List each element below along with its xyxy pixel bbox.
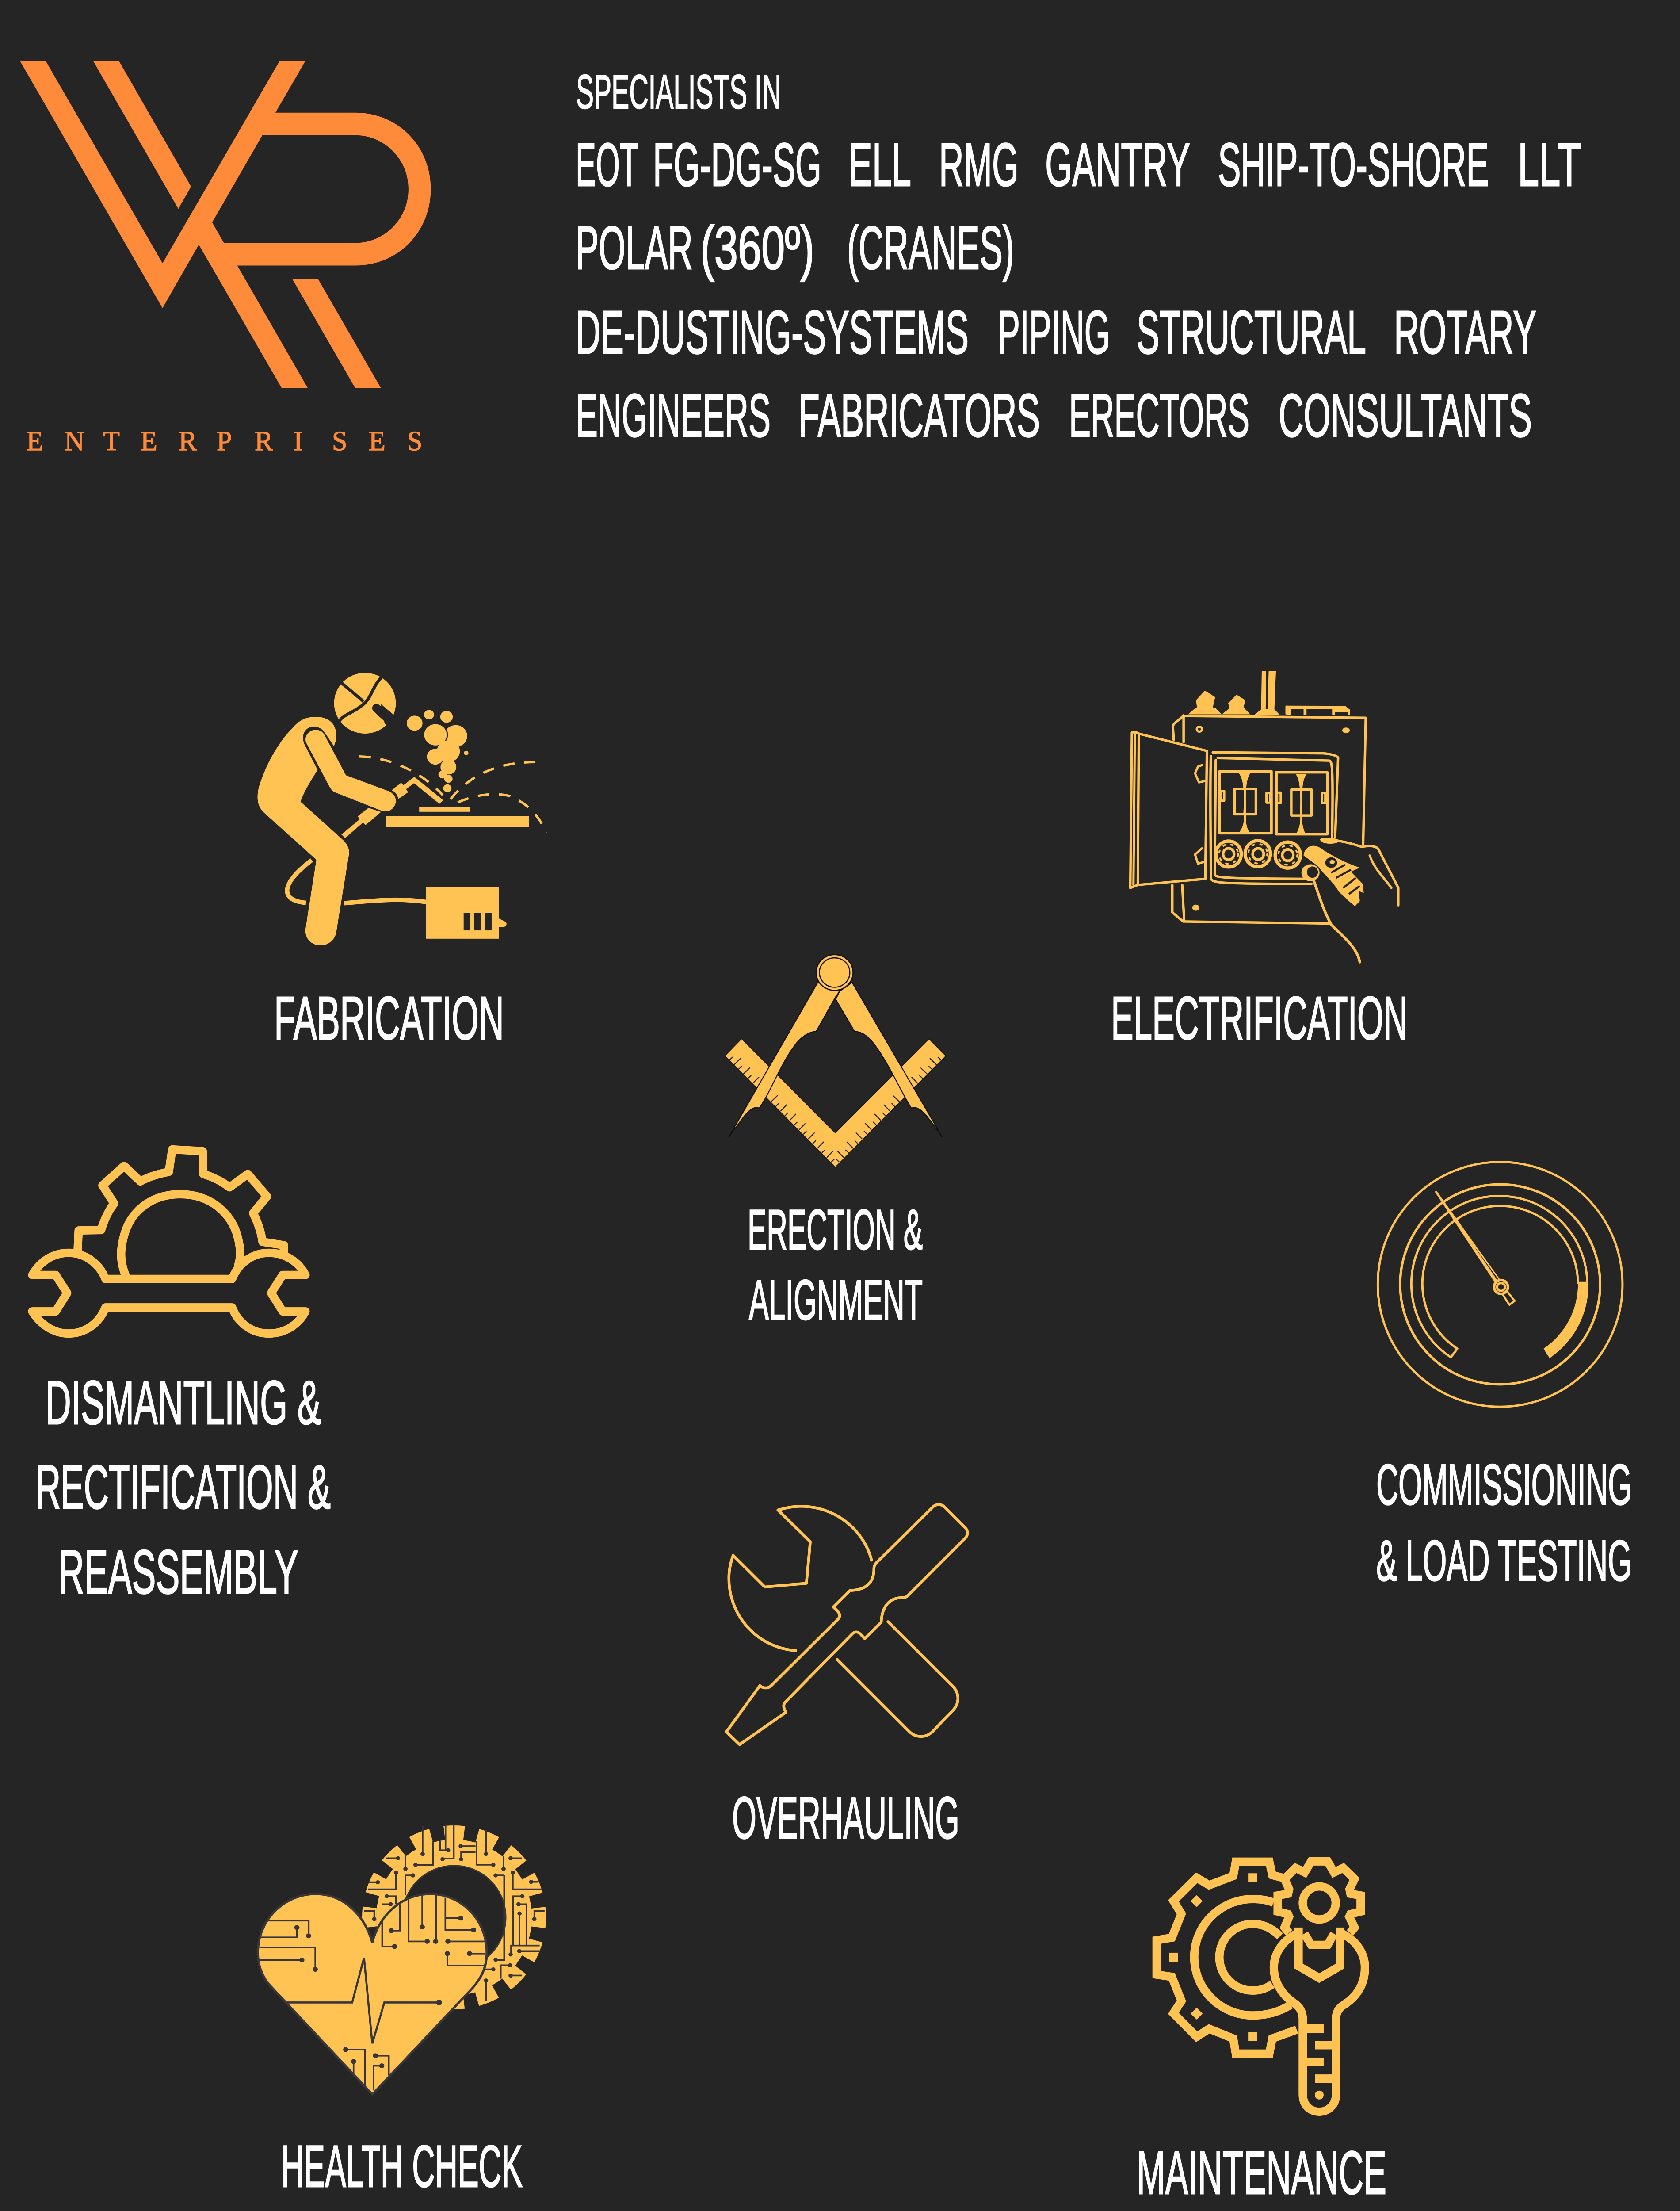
icon: maintenance gears and wrench: [1157, 1861, 1365, 2112]
wrench over gear: [1274, 1928, 1365, 2112]
work plates: [386, 807, 529, 827]
label: maintenance: MAINTENANCE: [1137, 2139, 1386, 2207]
wrench head: [729, 1506, 871, 1651]
icon: pressure gauge: [1378, 1162, 1623, 1407]
open door: [1130, 732, 1207, 888]
polar cranes line: POLAR: [576, 214, 693, 282]
gear circuit traces: [364, 1824, 545, 2001]
welder helmet: [334, 673, 401, 734]
large gear rings: [1194, 1899, 1291, 2016]
compass right leg: [836, 983, 943, 1137]
icon: welder: [257, 673, 546, 945]
roles line: [576, 382, 1532, 450]
gauge scale outline: [1411, 1196, 1587, 1357]
label: erection and alignment: ERECTION &: [748, 1198, 923, 1262]
large gear bolts: [1169, 1873, 1257, 2041]
cabinet: [1172, 715, 1366, 923]
systems line: PIPING: [998, 298, 1110, 367]
fuse switch left: [1220, 771, 1271, 833]
large gear: [1157, 1862, 1297, 2054]
label: commissioning and load testing: [1376, 1452, 1632, 1593]
crane types line: ELL: [849, 131, 911, 199]
screwdriver: [726, 1505, 967, 1744]
compass hinge: [816, 955, 853, 991]
crane types line: FG-DG-SG: [653, 131, 821, 199]
heart: [258, 1894, 487, 2094]
circuit gear: [364, 1824, 545, 2002]
roles line: ERECTORS: [1069, 382, 1249, 450]
torch handle: [341, 808, 381, 838]
fuse switch right: [1276, 772, 1327, 834]
logo wordmark: ENTERPRISES: [27, 426, 422, 456]
label: dismantling rectification reassembly: RECTIFICATION &: [36, 1452, 331, 1522]
header: specialists text block: [576, 65, 1581, 450]
gear inner arc: [121, 1194, 240, 1275]
ruler ticks left: [729, 1057, 834, 1162]
icon: heart and circuit gear: [258, 1824, 545, 2094]
crane types line: [576, 131, 1581, 199]
logo: VR Enterprises: [20, 61, 431, 456]
label: erection and alignment: ALIGNMENT: [749, 1269, 923, 1332]
crane types line: GANTRY: [1045, 131, 1190, 199]
square rule: [725, 1039, 946, 1167]
systems line: DE-DUSTING-SYSTEMS: [576, 298, 969, 367]
label: health check: HEALTH CHECK: [281, 2134, 523, 2200]
needle: [1435, 1191, 1515, 1305]
polar cranes line: [576, 214, 1014, 282]
wrench: [32, 1253, 305, 1334]
label: dismantling rectification reassembly: REASSEMBLY: [58, 1537, 298, 1607]
logo mark: [20, 61, 431, 388]
icon: wrench and screwdriver: [726, 1505, 967, 1744]
gauge scale filled: [1543, 1283, 1588, 1358]
welding torch: [392, 777, 443, 804]
ruler ticks right: [836, 1057, 941, 1162]
icon: electrical panel: [1130, 671, 1398, 962]
small gear: [1278, 1861, 1361, 1945]
label: erection and alignment: [748, 1198, 923, 1332]
top hardware: [1188, 671, 1350, 715]
polar cranes line: (360º): [700, 214, 814, 282]
welder body: [257, 717, 349, 945]
systems line: ROTARY: [1394, 298, 1536, 367]
crane types line: EOT: [576, 131, 638, 199]
gear outline: [77, 1149, 284, 1253]
label: electrification: ELECTRIFICATION: [1111, 984, 1408, 1052]
systems line: STRUCTURAL: [1137, 298, 1366, 367]
wrench handle: [837, 1622, 958, 1737]
roles line: FABRICATORS: [798, 382, 1040, 450]
welding machine: [426, 887, 507, 939]
sparks: [359, 757, 546, 833]
dials: [1216, 841, 1300, 868]
icon: gear and wrench: [32, 1149, 305, 1334]
gauge rings: [1378, 1162, 1623, 1407]
welder arm: [305, 730, 396, 811]
icon: square and compass: [725, 955, 946, 1167]
crane types line: LLT: [1518, 131, 1581, 199]
inner frame: [1210, 752, 1338, 884]
welding cable: [287, 860, 426, 903]
crane types line: RMG: [939, 131, 1019, 199]
compass left leg: [729, 983, 840, 1137]
roles line: ENGINEERS: [576, 382, 771, 450]
label: dismantling rectification reassembly: [36, 1368, 331, 1607]
hand: [1302, 838, 1398, 962]
polar cranes line: (CRANES): [847, 214, 1014, 282]
label: overhauling: OVERHAULING: [732, 1785, 959, 1851]
label: dismantling rectification reassembly: DISMANTLING &: [46, 1368, 321, 1437]
specialists heading: SPECIALISTS IN: [576, 65, 781, 119]
label: fabrication: FABRICATION: [274, 984, 504, 1052]
heartbeat line: [286, 1958, 439, 2043]
heart circuit traces: [260, 1895, 485, 2090]
smoke bubbles: [407, 710, 469, 792]
